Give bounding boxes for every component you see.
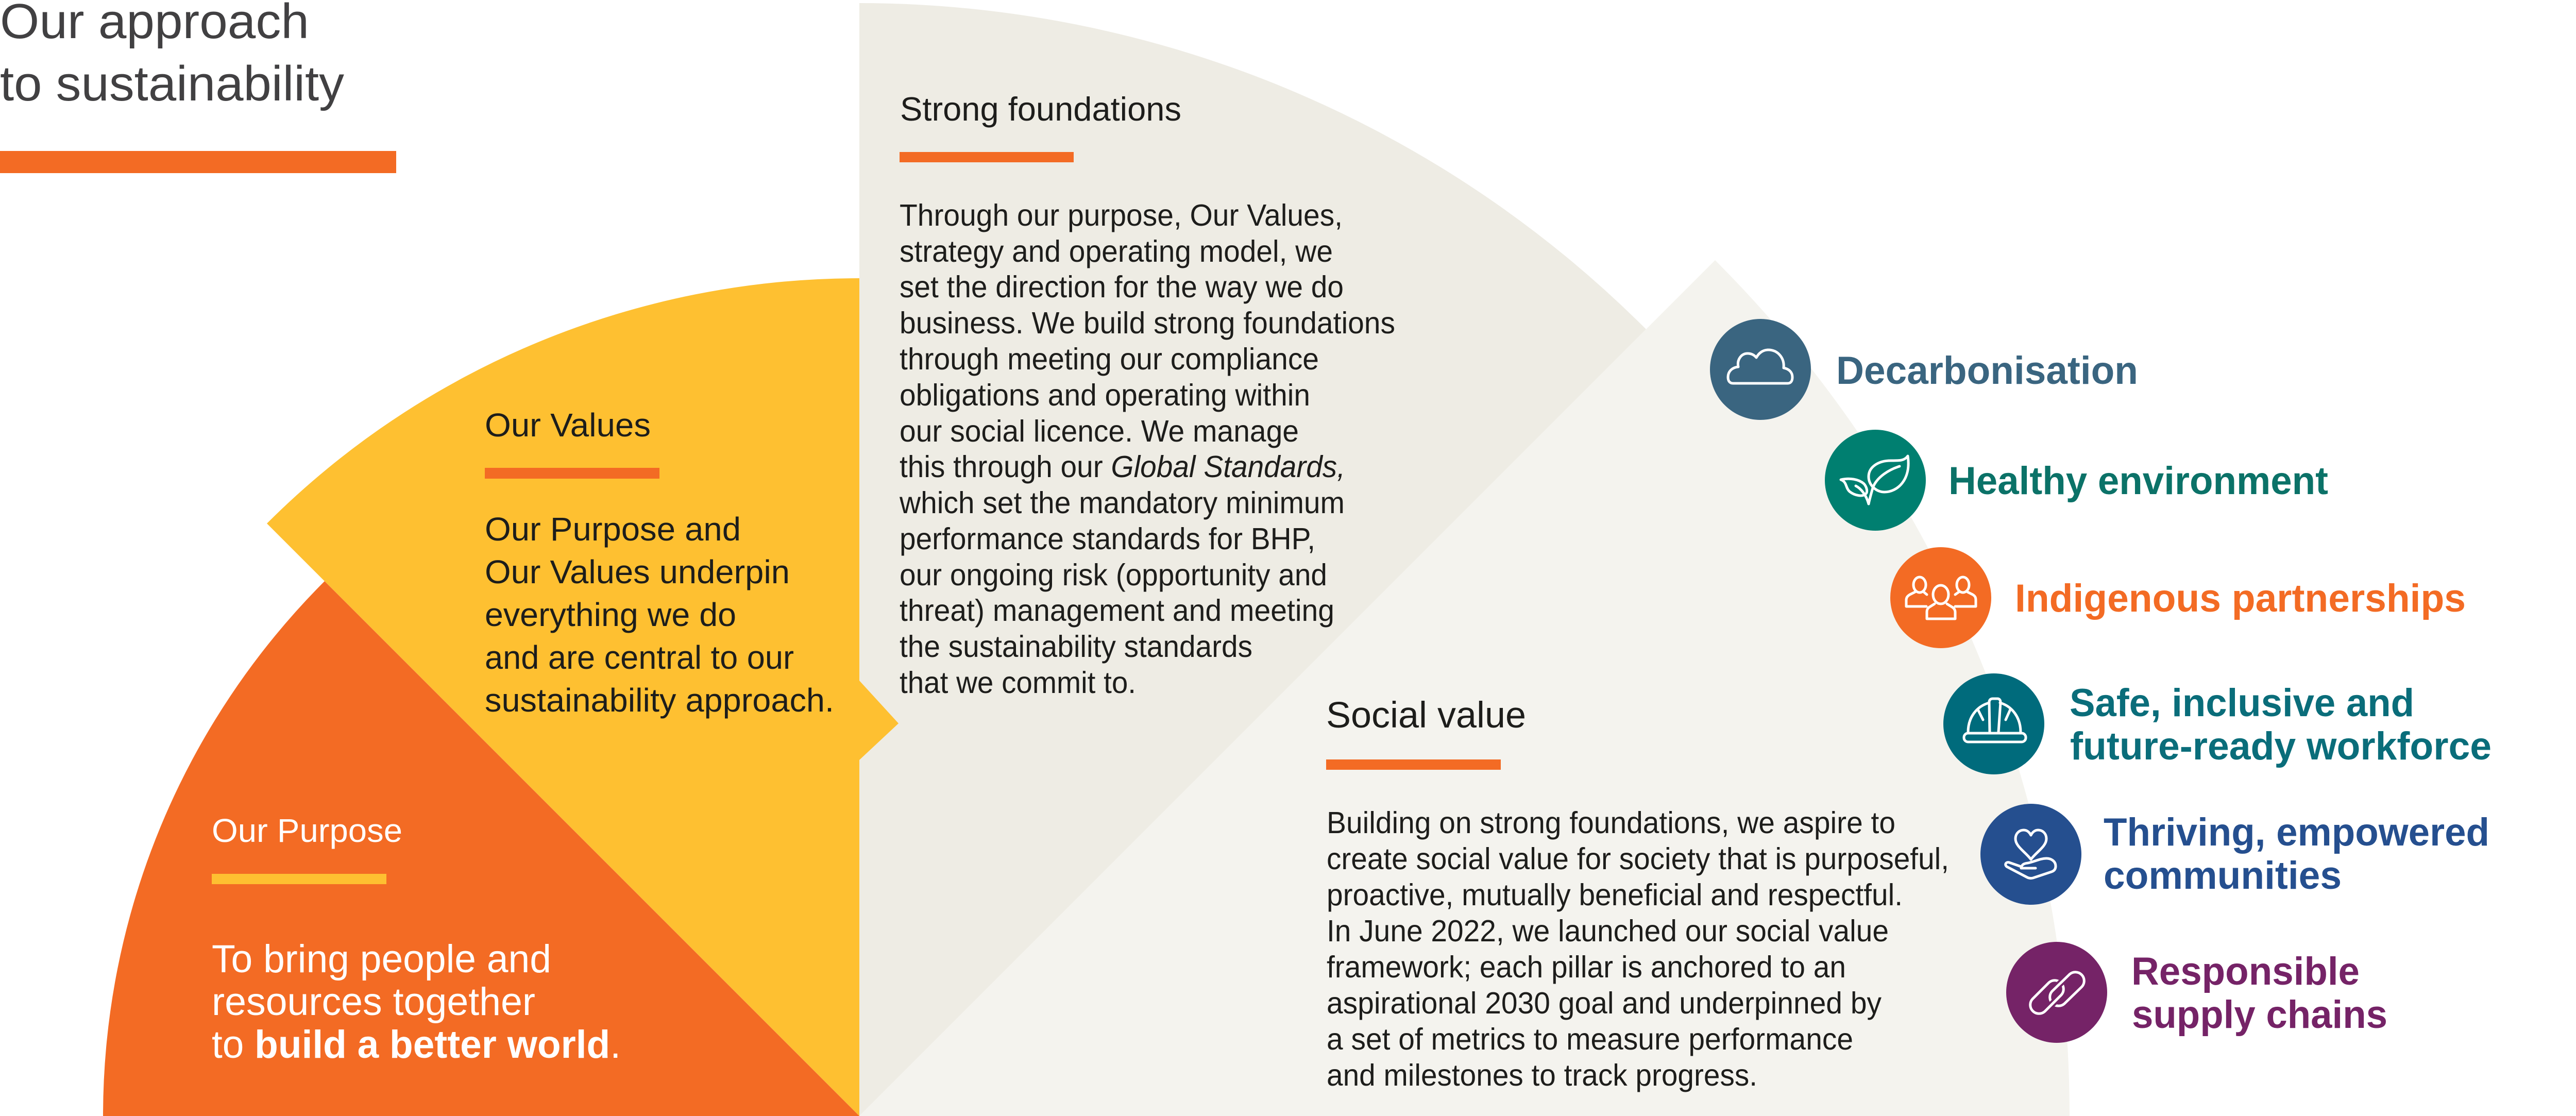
social value body text — [1327, 806, 1949, 1092]
label: responsible supply chains — [2131, 950, 2387, 1037]
our purpose heading: Our Purpose — [212, 812, 402, 849]
social value wedge — [859, 260, 2070, 1116]
label: safe, inclusive and future-ready workforce: future-ready workforce — [2070, 724, 2492, 768]
social value body text: Building on strong foundations, we aspire to — [1327, 806, 1895, 840]
title text: to sustainability — [0, 56, 344, 111]
label: responsible supply chains: Responsible — [2131, 950, 2360, 993]
strong foundations body text: Through our purpose, Our Values, — [900, 198, 1343, 232]
label: safe, inclusive and future-ready workforce: Safe, inclusive and — [2070, 681, 2414, 725]
icon: leaves — [1825, 430, 1926, 531]
strong foundations body text: that we commit to. — [900, 666, 1136, 700]
strong foundations body text: our social licence. We manage — [900, 414, 1299, 448]
pillar: safe, inclusive and future-ready workforce — [1943, 673, 2492, 774]
our purpose body text — [212, 937, 621, 1067]
our purpose body text: To bring people and — [212, 937, 551, 981]
strong foundations body text: which set the mandatory minimum — [899, 486, 1345, 520]
strong foundations body text: through meeting our compliance — [900, 342, 1319, 376]
our values heading: Our Values — [485, 407, 651, 444]
social value body text: In June 2022, we launched our social value — [1327, 914, 1889, 948]
label: healthy environment: Healthy environment — [1948, 459, 2328, 503]
strong foundations body text: this through our Global Standards, — [900, 450, 1345, 484]
strong foundations body text: performance standards for BHP, — [900, 522, 1315, 556]
icon: people — [1890, 547, 1991, 648]
strong foundations bar — [900, 152, 1074, 162]
strong foundations body text: business. We build strong foundations — [900, 306, 1395, 340]
social value heading: Social value — [1326, 695, 1526, 736]
our purpose bar — [212, 874, 386, 884]
pillar: indigenous partnerships — [1890, 547, 2466, 648]
our values body text: everything we do — [485, 596, 736, 633]
our values body text: and are central to our — [485, 639, 794, 676]
our purpose body text: resources together — [212, 980, 535, 1024]
our purpose body text: to build a better world. — [212, 1023, 621, 1067]
social value bar — [1326, 759, 1501, 770]
label: thriving, empowered communities: Thriving, empowered — [2104, 810, 2489, 854]
strong foundations body text: our ongoing risk (opportunity and — [900, 558, 1327, 592]
pillar: healthy environment — [1825, 430, 2328, 531]
strong foundations body text: strategy and operating model, we — [900, 234, 1333, 268]
panel: our values — [267, 278, 899, 1116]
icon: hard hat — [1943, 673, 2044, 774]
strong foundations body text: the sustainability standards — [900, 630, 1252, 664]
pillar: thriving, empowered communities — [1980, 804, 2489, 905]
social value body text: and milestones to track progress. — [1327, 1058, 1757, 1092]
strong foundations heading: Strong foundations — [900, 90, 1181, 128]
social value body text: framework; each pillar is anchored to an — [1327, 950, 1846, 984]
strong foundations body text: set the direction for the way we do — [900, 270, 1344, 304]
pillar: responsible supply chains — [2006, 942, 2387, 1043]
strong foundations body text: threat) management and meeting — [900, 594, 1334, 628]
our values body text — [485, 511, 834, 719]
social value body text: proactive, mutually beneficial and respectful. — [1327, 878, 1903, 912]
label: indigenous partnerships: Indigenous partnerships — [2015, 577, 2466, 620]
our values wedge — [267, 278, 899, 1116]
strong foundations wedge — [859, 3, 1646, 1116]
strong foundations body text: obligations and operating within — [900, 378, 1310, 412]
label: thriving, empowered communities — [2104, 810, 2489, 898]
title block — [0, 0, 396, 173]
label: decarbonisation: Decarbonisation — [1836, 349, 2138, 393]
icon: cloud — [1710, 319, 1811, 420]
title underline bar — [0, 151, 396, 173]
panel: social value — [859, 260, 2070, 1116]
our values body text: Our Values underpin — [485, 553, 790, 590]
label: responsible supply chains: supply chains — [2132, 993, 2387, 1037]
panel: strong foundations — [859, 3, 1646, 1116]
icon: chain links — [2006, 942, 2107, 1043]
pillar: decarbonisation — [1710, 319, 2138, 420]
our purpose wedge — [103, 581, 859, 1116]
panel: our purpose — [103, 581, 859, 1116]
icon: heart in hand — [1980, 804, 2081, 905]
our values bar — [485, 468, 659, 479]
social value body text: a set of metrics to measure performance — [1327, 1022, 1853, 1056]
our values body text: Our Purpose and — [485, 511, 741, 548]
social value body text: aspirational 2030 goal and underpinned by — [1327, 986, 1882, 1020]
our values body text: sustainability approach. — [485, 682, 834, 719]
title text — [0, 0, 344, 111]
label: safe, inclusive and future-ready workforce — [2070, 681, 2492, 768]
label: thriving, empowered communities: communities — [2104, 854, 2342, 898]
strong foundations body text — [899, 198, 1395, 700]
social value body text: create social value for society that is purposeful, — [1327, 842, 1949, 876]
